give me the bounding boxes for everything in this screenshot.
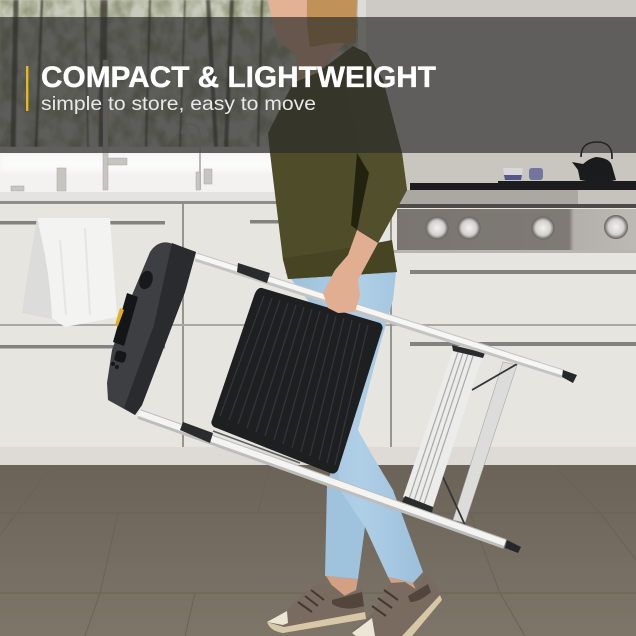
subtitle: simple to store, easy to move: [41, 93, 316, 115]
upper rail: [196, 256, 577, 383]
backsplash: [0, 153, 393, 193]
banner overlay: [0, 17, 636, 153]
window with trees: [0, 0, 366, 153]
neck and face: [268, 0, 345, 83]
ankles: [326, 576, 417, 598]
ladder: [107, 230, 577, 553]
countertop: [0, 192, 400, 202]
cabinets: [0, 204, 393, 448]
step: [402, 345, 485, 514]
brace wires: [443, 364, 517, 525]
carrying hand: [323, 230, 378, 313]
platform step: [211, 288, 383, 474]
floor: [0, 465, 636, 636]
right shoe: [352, 572, 442, 636]
rear leg: [325, 440, 372, 579]
oven doors: [393, 253, 636, 448]
faucets: [11, 60, 212, 191]
wall: [365, 0, 636, 190]
icon: stove knobs: [426, 215, 628, 240]
lower rail: [139, 413, 521, 553]
back leg: [453, 362, 517, 523]
towel: [22, 218, 117, 327]
stove: [393, 142, 636, 253]
sweater: [268, 46, 407, 279]
left shoe: [267, 582, 366, 633]
cups: [503, 168, 523, 180]
handle: [107, 242, 196, 415]
icon: kettle: [572, 142, 616, 182]
title: COMPACT & LIGHTWEIGHT: [41, 61, 436, 94]
hair: [307, 0, 357, 47]
person: [267, 0, 442, 636]
front leg and hips: [285, 272, 423, 583]
accent bar: [26, 66, 28, 111]
kick plate: [0, 447, 636, 466]
